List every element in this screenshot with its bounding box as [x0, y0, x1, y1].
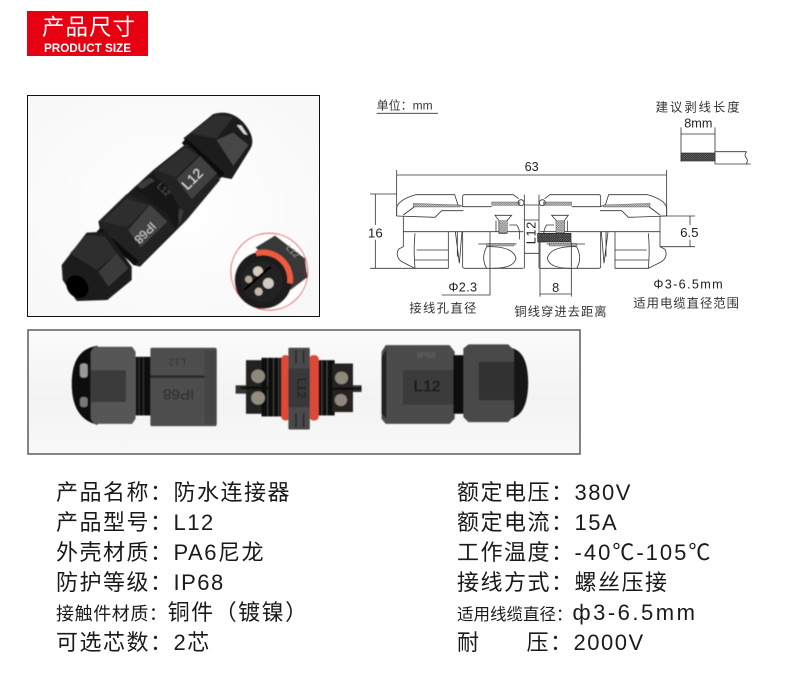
icon: connector body with IP68	[98, 194, 175, 267]
spec: core count: 可选芯数：2芯	[56, 630, 211, 655]
icon: right plug	[382, 344, 528, 424]
icon: center ring: L12	[155, 181, 173, 198]
panel: disassembled connector photo	[28, 330, 580, 454]
dimension: hole diameter: Φ2.3	[448, 281, 477, 295]
dimension: hole diameter: 接线孔直径	[409, 301, 478, 316]
banner: product size: 产品尺寸	[42, 15, 136, 40]
spec: working temperature: 工作温度：-40℃-105℃	[457, 540, 712, 565]
diagram: recommended strip length	[656, 100, 751, 164]
spec: withstand voltage: 耐 压：2000V	[457, 630, 645, 655]
dimension: wire insertion depth: 铜线穿进去距离	[514, 304, 608, 319]
diagram: recommended strip length: 8mm	[684, 116, 712, 130]
icon: connector body with L12	[153, 143, 220, 230]
dimension: wire insertion depth: 8	[552, 281, 559, 295]
note: cable range: 适用电缆直径范围	[633, 296, 740, 310]
icon: left plug	[72, 346, 217, 426]
panel: dimension drawing	[367, 97, 751, 319]
specification list: left column	[56, 480, 309, 655]
icon: connector body with L12: L12	[178, 165, 206, 193]
dimension: height 16: 16	[368, 225, 383, 240]
dimension: height 16	[367, 194, 415, 268]
label: L12 on section: L12	[525, 221, 539, 244]
note: cable range	[633, 278, 740, 310]
spec: rated current: 额定电流：15A	[457, 510, 618, 535]
icon: connector core	[98, 143, 220, 267]
inset: connector terminals: L12	[284, 243, 302, 260]
label: L12 on section	[524, 205, 539, 253]
dimension: overall length 63	[397, 160, 667, 216]
icon: center terminal block: L12	[294, 378, 309, 398]
spec: housing material: 外壳材质：PA6尼龙	[56, 540, 265, 565]
banner: product size	[27, 11, 148, 56]
icon: left plug: L12	[168, 356, 186, 366]
icon: left plug: IP68	[163, 385, 194, 402]
spec: wiring method: 接线方式：螺丝压接	[457, 570, 669, 595]
dimension: cable 6.5: 6.5	[680, 225, 699, 240]
spec: protection grade: 防护等级：IP68	[56, 570, 225, 595]
note: cable range: Φ3-6.5mm	[653, 278, 724, 292]
icon: upper gland cap	[183, 113, 252, 179]
icon: right plug: L12	[413, 379, 441, 395]
icon: center ring	[135, 175, 179, 228]
spec: rated voltage: 额定电压：380V	[457, 480, 632, 505]
spec: contact material: 接触件材质：铜件（镀镍）	[56, 600, 309, 625]
panel: assembled connector photo	[28, 96, 320, 316]
inset: connector terminals	[231, 233, 308, 310]
dimension: cable 6.5	[660, 216, 700, 247]
spec: cable diameter: 适用线缆直径：ф3-6.5mm	[457, 600, 697, 625]
dimension: overall length 63: 63	[525, 160, 539, 174]
icon: connector body with IP68: IP68	[131, 219, 159, 247]
diagram: connector section left half	[397, 195, 524, 268]
dimension: wire insertion depth	[514, 242, 608, 319]
icon: center terminal block	[236, 348, 362, 430]
diagram: recommended strip length: 建议剥线长度	[656, 100, 742, 115]
icon: lower gland cap	[62, 230, 137, 303]
icon: right plug: IP68	[417, 350, 436, 360]
spec: product name: 产品名称：防水连接器	[56, 480, 291, 505]
specification list: right column	[457, 480, 712, 655]
dimension: hole diameter	[409, 232, 490, 316]
spec: model: 产品型号：L12	[56, 510, 215, 535]
banner: product size: PRODUCT SIZE	[44, 42, 131, 55]
copper wire insert	[538, 233, 571, 242]
diagram: connector section right half	[539, 195, 667, 268]
text: unit: 单位：mm	[377, 97, 433, 112]
